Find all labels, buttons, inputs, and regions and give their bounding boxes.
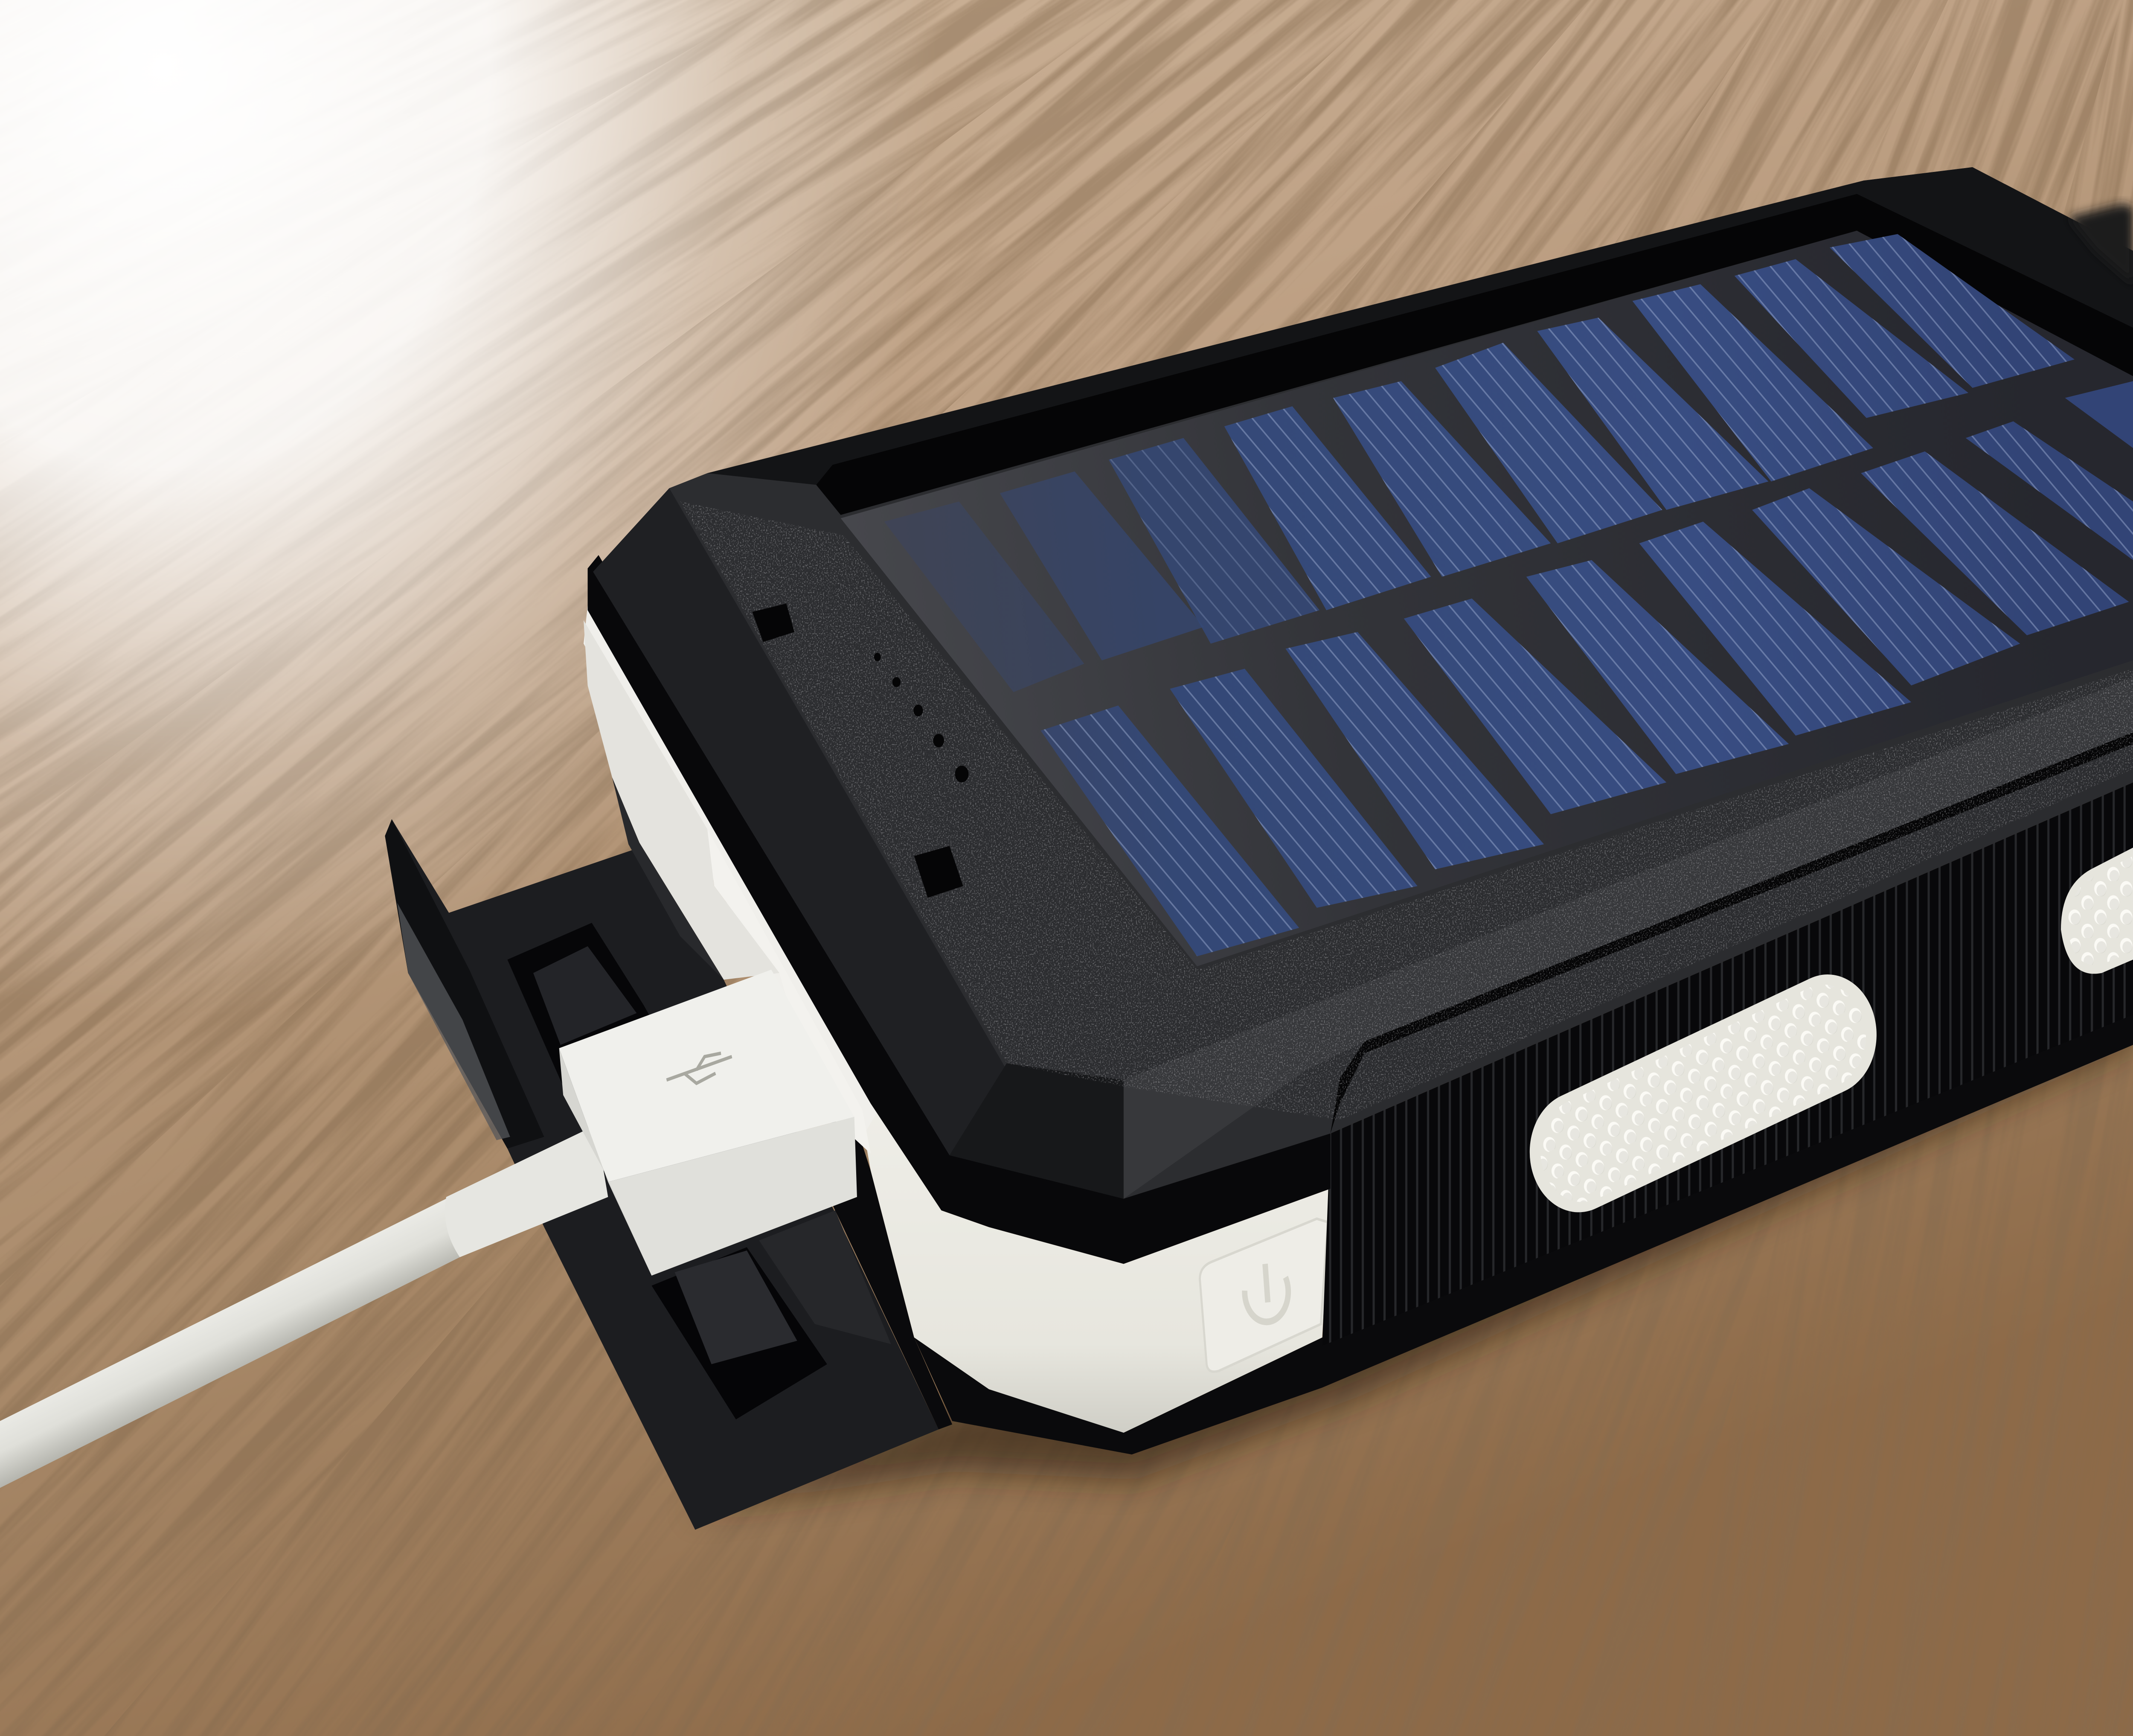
- USB plug: [559, 970, 857, 1276]
- underside of case: [914, 1003, 2133, 1454]
- port shadow: [612, 777, 724, 980]
- power bank top face: [588, 167, 2133, 1264]
- shadow under power bank: [680, 1003, 2133, 1513]
- USB cable: [0, 1125, 608, 1488]
- far clip at back of case: [2068, 204, 2133, 284]
- side gasket panel: [759, 1210, 891, 1344]
- indicator LEDs: [752, 604, 968, 898]
- strain relief: [445, 1125, 608, 1257]
- main face: [593, 167, 2133, 1199]
- grip: second white pill: [2061, 848, 2133, 974]
- outer black lip: [588, 555, 1331, 1264]
- white strip: [707, 829, 871, 1154]
- upper gasket: [507, 923, 680, 1083]
- upper rim: [707, 167, 2133, 485]
- raised bezel groove: [816, 194, 2133, 515]
- corner wedge: [950, 1063, 1124, 1199]
- lower bevel, below slit: [1331, 744, 2133, 1134]
- lower gasket: [651, 1247, 827, 1419]
- cover flap: [385, 819, 544, 1149]
- USB symbol: [666, 1053, 732, 1083]
- plug top face: [559, 970, 854, 1182]
- solar cells: [884, 234, 2133, 956]
- strip beside black lip: [584, 605, 878, 1137]
- power button: [1200, 1219, 1328, 1372]
- slit: [1331, 732, 2133, 1134]
- port cover: [385, 819, 939, 1530]
- ribbed side of case: [1322, 782, 2133, 1346]
- port side block: [584, 620, 779, 980]
- plug left face: [559, 1048, 651, 1276]
- white end cap: [584, 605, 1331, 1433]
- lower bevel, above slit: [1124, 677, 2133, 1199]
- solar glass: [841, 231, 2133, 966]
- shadow between cover and cap: [816, 1087, 952, 1429]
- dark edge band: [593, 488, 1007, 1155]
- dust speckle: [680, 502, 2133, 1120]
- plug front face: [608, 1117, 857, 1276]
- grip: white pill: [1515, 957, 1891, 1230]
